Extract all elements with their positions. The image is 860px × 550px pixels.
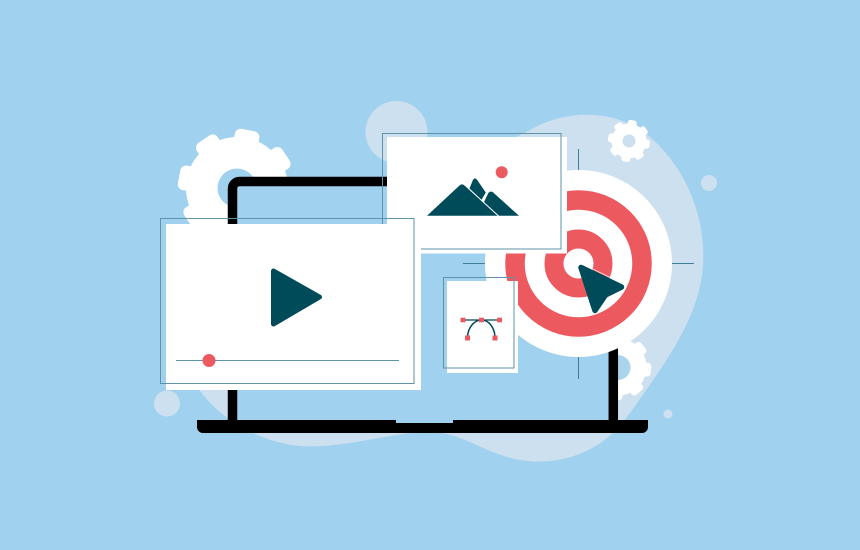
decorative circle: small lower right [664, 410, 672, 418]
icon: cursor arrow [581, 264, 622, 310]
icon: small gear top right [608, 120, 650, 162]
icon: bezier curve [460, 318, 502, 340]
icon: gear behind laptop [585, 334, 651, 400]
panel: video player window [160, 218, 421, 390]
laptop [197, 182, 648, 433]
decorative circle: top [366, 101, 428, 163]
crosshair lines around target [463, 149, 694, 379]
background blob [198, 115, 703, 462]
icon: sun dot [496, 166, 508, 178]
icon: play button [274, 271, 320, 324]
decorative circle: right [701, 175, 717, 191]
panel: image window [382, 134, 567, 254]
timeline marker [202, 354, 216, 367]
target [485, 170, 672, 357]
video timeline [176, 360, 399, 362]
icon: mountains [427, 178, 519, 216]
laptop base [197, 420, 648, 433]
decorative circle: lower left [154, 390, 180, 416]
panel: vector tool window [444, 278, 518, 373]
laptop screen [232, 182, 613, 425]
icon: large gear [177, 128, 297, 248]
